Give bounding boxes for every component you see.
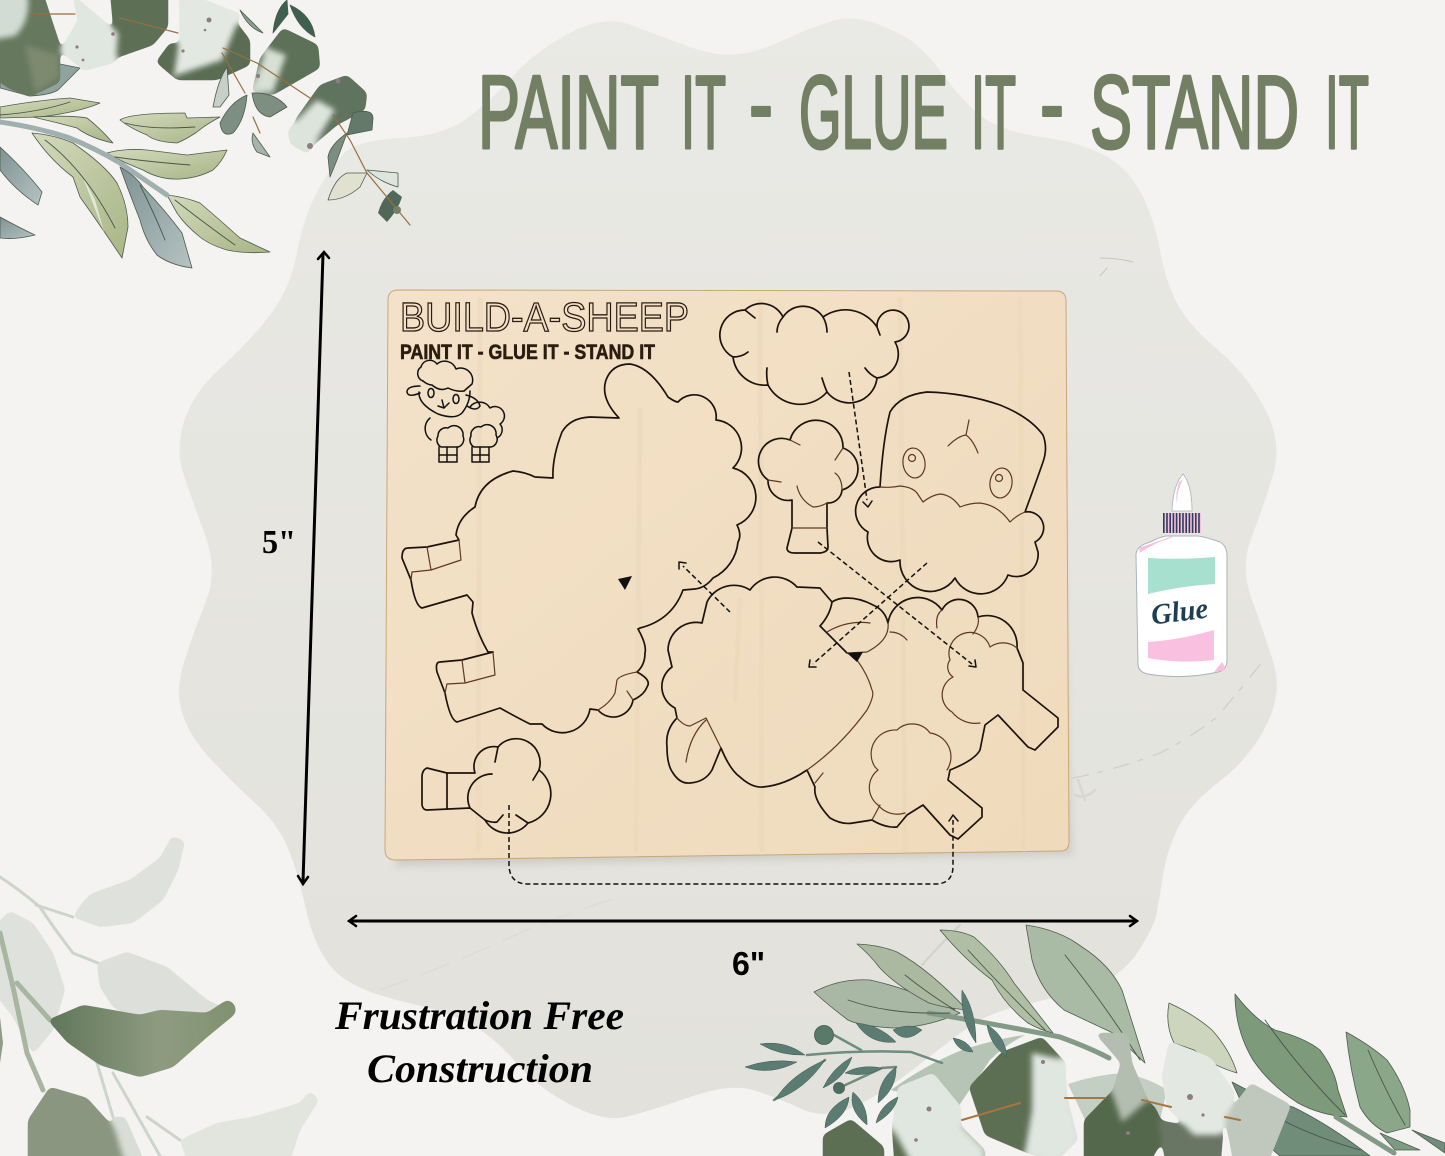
title: IT xyxy=(681,55,726,171)
puzzle piece: front leg xyxy=(758,420,858,553)
icon: small finished sheep xyxy=(407,360,504,462)
puzzle piece: lower left leg xyxy=(422,739,551,833)
title: GLUE xyxy=(799,55,948,171)
caption: frustration free construction xyxy=(334,993,624,1091)
title: STAND xyxy=(1090,55,1299,171)
icon: glue bottle: Glue xyxy=(1149,593,1210,631)
puzzle piece: head xyxy=(856,392,1046,594)
puzzle piece: sheep body back xyxy=(402,364,756,733)
arrow: front to back xyxy=(679,562,730,612)
dimension arrow: width xyxy=(349,916,1137,926)
board subheading: PAINT IT - GLUE IT - STAND IT xyxy=(400,341,655,364)
marble veins xyxy=(380,258,1263,990)
arrow: lower leg to foot xyxy=(509,805,958,884)
background blob xyxy=(179,18,1277,1118)
title: - xyxy=(1040,46,1064,162)
decoration: bottom right watercolor foliage xyxy=(745,925,1445,1156)
caption: frustration free construction: Construction xyxy=(367,1046,593,1091)
title: IT xyxy=(971,55,1016,171)
title: - xyxy=(749,46,773,162)
title: PAINT xyxy=(478,55,659,171)
nose mark xyxy=(847,652,863,662)
decoration: top left watercolor foliage xyxy=(0,0,410,268)
board heading: BUILD-A-SHEEP xyxy=(400,294,689,340)
decoration: bottom left watercolor leaves xyxy=(0,836,319,1156)
dimension label: 5 inch: 5" xyxy=(262,524,296,561)
dimension arrow: height xyxy=(298,252,329,884)
arrow: leg to body xyxy=(818,542,976,667)
caption: frustration free construction: Frustration Free xyxy=(334,993,624,1038)
text: IT xyxy=(1325,55,1369,171)
dimension label: 6 inch: 6" xyxy=(732,945,765,982)
panel: wooden puzzle board xyxy=(385,290,1072,884)
puzzle piece: sheep front body xyxy=(662,577,1058,839)
arrow: head to body xyxy=(809,563,927,667)
title xyxy=(478,46,1369,171)
puzzle piece: wool cloud xyxy=(720,304,909,404)
icon: nose mark xyxy=(618,576,632,590)
arrow: cloud to head xyxy=(849,372,872,507)
icon: glue bottle xyxy=(1136,474,1227,677)
